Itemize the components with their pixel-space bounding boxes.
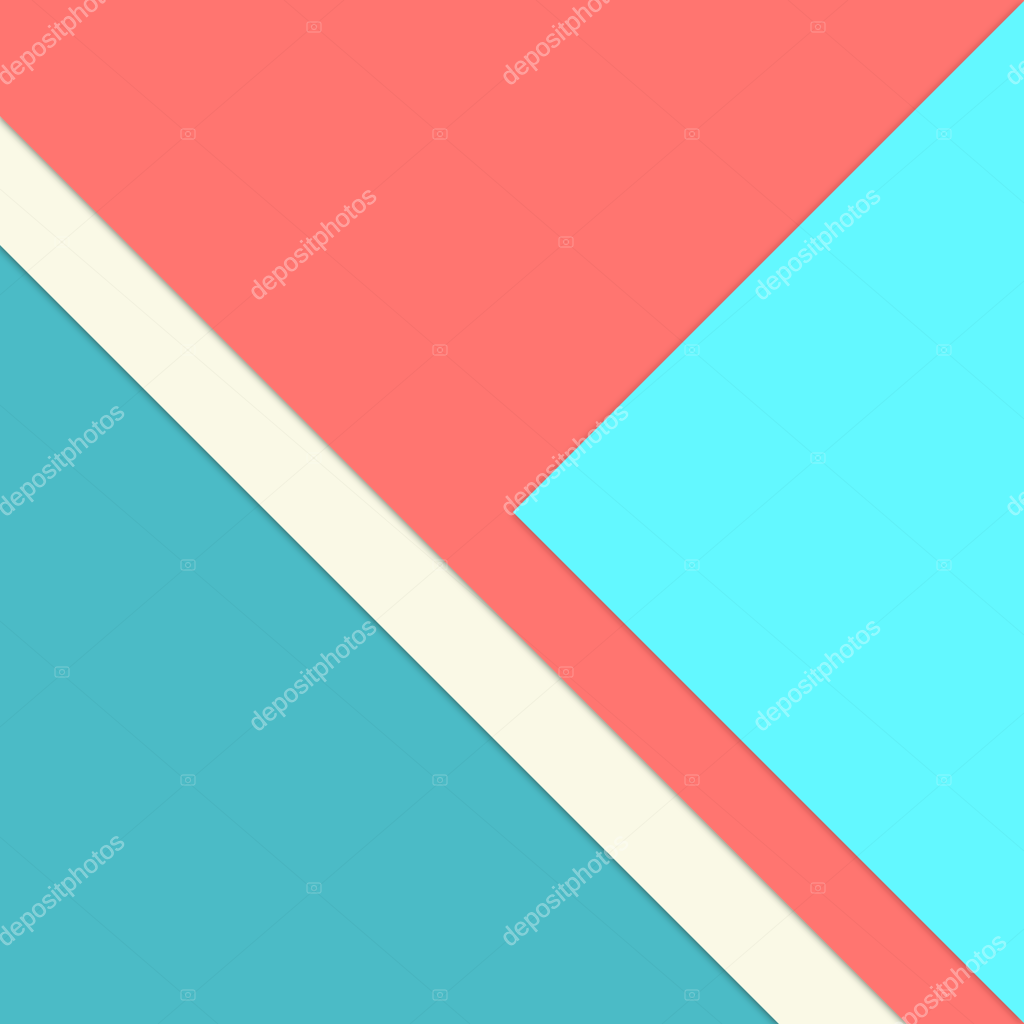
watermark: depositphotos text group: depositphotos bbox=[243, 613, 382, 737]
watermark: depositphotos text group: depositphotos bbox=[747, 613, 886, 737]
watermark: depositphotos text group: depositphotos bbox=[495, 828, 634, 952]
watermark: depositphotos text group: depositphotos bbox=[495, 398, 634, 522]
watermark: depositphotos text group: depositphotos bbox=[243, 182, 382, 306]
watermark: depositphotos text group: depositphotos bbox=[747, 182, 886, 306]
panel: cyan arrow-shaped layer bbox=[513, 1, 1024, 1023]
